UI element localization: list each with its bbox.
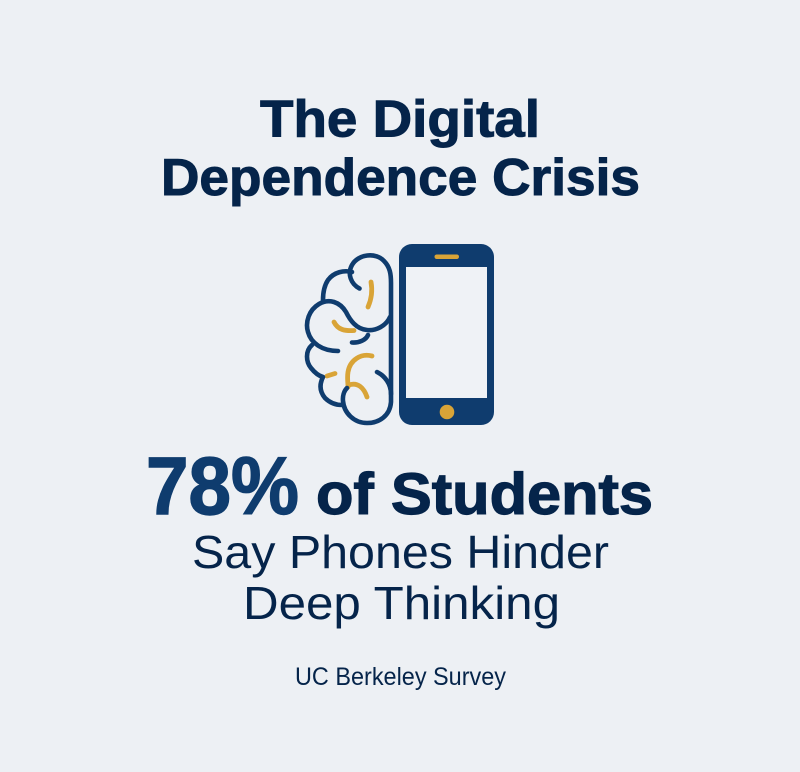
title: The Digital (260, 90, 540, 148)
icon: smartphone (399, 244, 494, 425)
icon: brain (307, 255, 391, 423)
brain outline (307, 255, 391, 423)
title (161, 90, 640, 207)
icon: brain and smartphone (307, 244, 494, 425)
title: Dependence Crisis (161, 149, 640, 207)
brain gold accents (327, 282, 372, 397)
source: UC Berkeley Survey (295, 663, 506, 691)
subheading: Say Phones Hinder (192, 526, 609, 578)
subheading (192, 526, 609, 629)
phone speaker (434, 254, 459, 259)
headline statistic (146, 441, 653, 532)
phone body (399, 244, 494, 425)
headline statistic: of Students (316, 462, 653, 527)
subheading: Deep Thinking (243, 577, 560, 629)
phone screen (406, 267, 487, 398)
headline statistic: 78% (146, 441, 299, 532)
phone home button (440, 405, 454, 419)
